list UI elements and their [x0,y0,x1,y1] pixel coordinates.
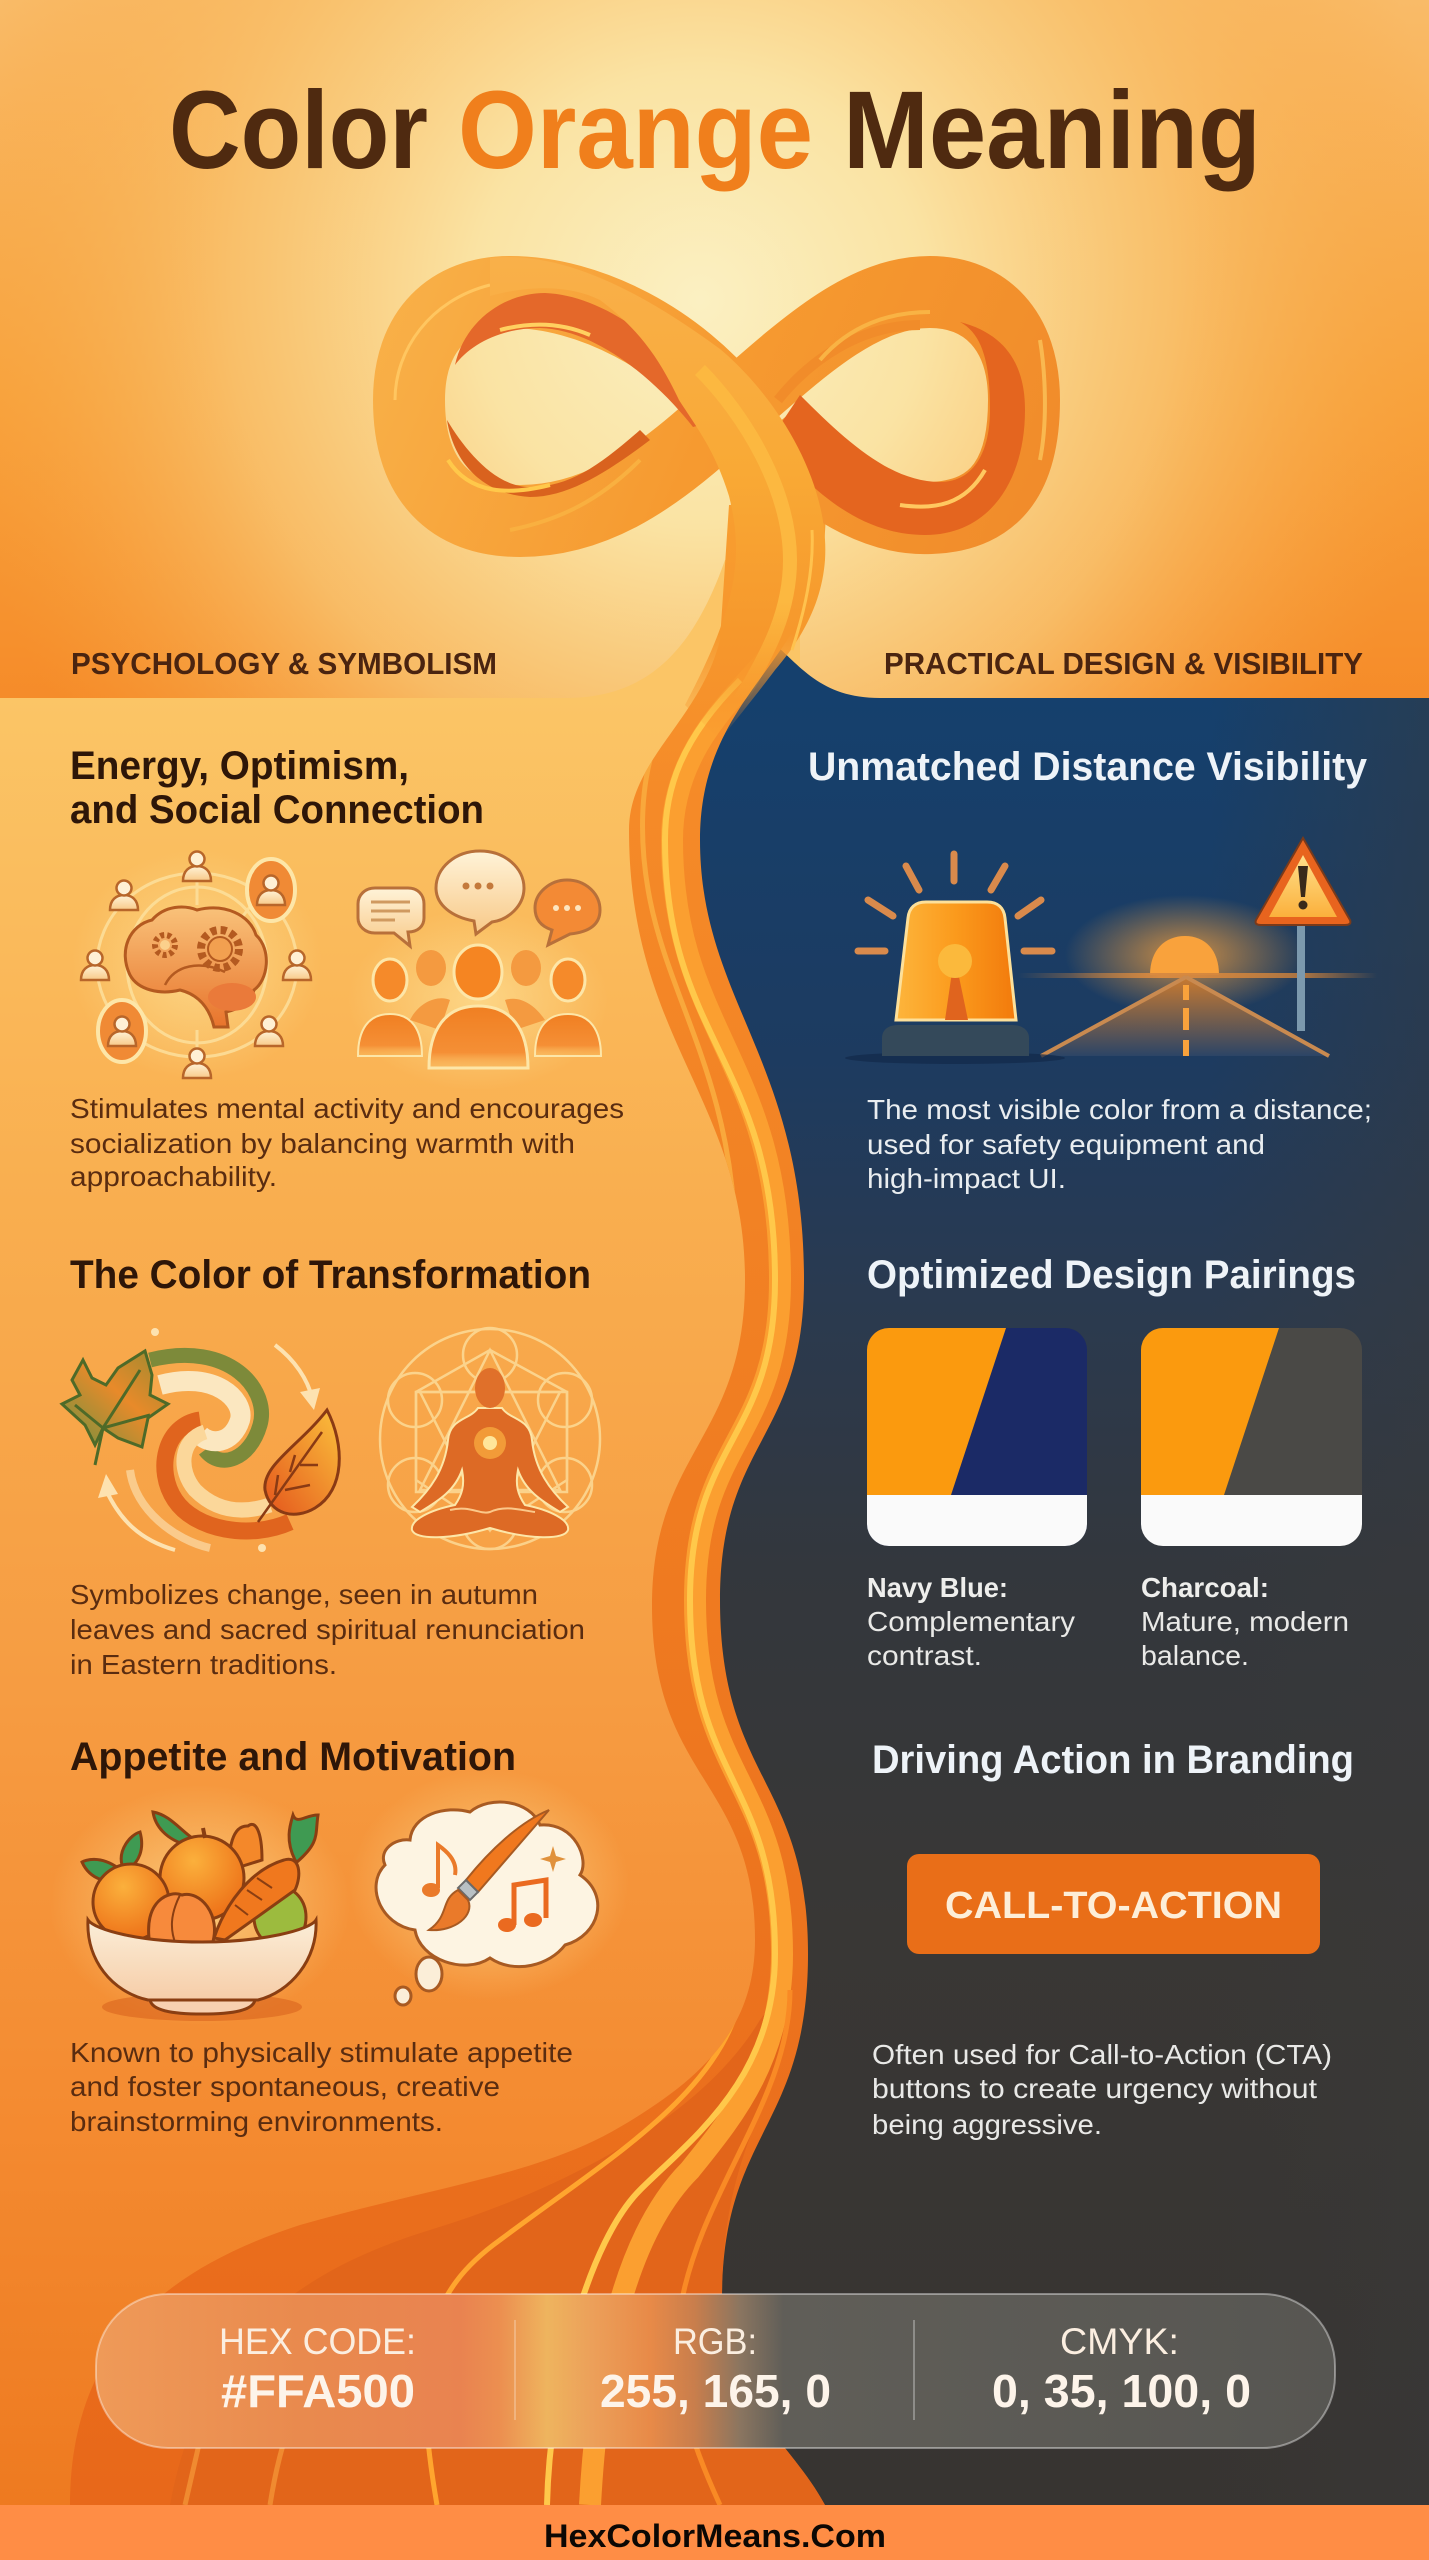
heading: energy: and Social Connection [70,788,484,832]
text: energy description: socialization by balancing warmth with [70,1128,575,1159]
stat: hex code: #FFA500 [221,2365,415,2417]
title: Orange [458,69,813,192]
text: visibility description [867,1094,1372,1194]
swatch: charcoal [1141,1328,1362,1546]
icon: meditating figure [380,1328,600,1549]
text: transformation description [70,1579,585,1680]
stat: hex code [219,2321,416,2417]
text: appetite description: brainstorming environments. [70,2106,443,2137]
panel: psychology and symbolism [0,560,800,2505]
stats pill [96,2294,1335,2448]
icon: people with speech bubbles [348,851,608,1090]
label: navy blue [867,1572,1075,1671]
infinity ribbon [395,257,1045,740]
text: appetite description: Known to physically stimulate appetite [70,2037,573,2068]
stat: rgb [600,2321,831,2417]
heading: energy: Energy, Optimism, [70,744,409,788]
icon: leaf swirl [62,1328,339,1552]
footer bar [0,2505,1429,2560]
stat: rgb: RGB: [673,2321,757,2362]
label: navy blue: Navy Blue: [867,1572,1008,1603]
text: transformation description: Symbolizes change, seen in autumn [70,1579,538,1610]
heading: energy [70,744,484,832]
swatch: navy blue [867,1328,1087,1546]
footer bar: HexColorMeans.Com [544,2518,886,2554]
text: transformation description: in Eastern traditions. [70,1649,337,1680]
section header: psychology: PSYCHOLOGY & SYMBOLISM [71,646,497,681]
title: Meaning [843,69,1261,192]
heading: transformation: The Color of Transformation [70,1253,591,1297]
text: branding description: buttons to create urgency without [872,2073,1317,2104]
text: branding description: being aggressive. [872,2109,1102,2140]
heading: appetite: Appetite and Motivation [70,1735,516,1779]
icon: creative thought cloud [349,1770,629,2005]
text: appetite description: and foster spontaneous, creative [70,2071,500,2102]
icon: fruit bowl [50,1785,350,2025]
icon: road at sunset with warning sign [1018,838,1377,1056]
stat: cmyk: 0, 35, 100, 0 [992,2365,1251,2417]
text: visibility description: high-impact UI. [867,1163,1066,1194]
text: visibility description: used for safety equipment and [867,1129,1265,1160]
text: branding description: Often used for Call-to-Action (CTA) [872,2039,1332,2070]
icon: beacon [845,854,1065,1064]
text: appetite description [70,2037,573,2137]
icon: brain network [72,850,322,1080]
text: branding description [872,2039,1332,2140]
label: charcoal: Mature, modern [1141,1606,1349,1637]
stat: cmyk [992,2321,1251,2417]
panel: practical design and visibility [685,640,1429,2505]
label: charcoal: Charcoal: [1141,1572,1269,1603]
central flowing stream [70,500,826,2505]
background: top gradient [0,0,1429,720]
label: charcoal: balance. [1141,1640,1249,1671]
text: energy description [70,1093,624,1192]
heading: visibility: Unmatched Distance Visibility [808,745,1368,789]
text: energy description: Stimulates mental activity and encourages [70,1093,624,1124]
section header: practical: PRACTICAL DESIGN & VISIBILITY [884,646,1363,681]
label: navy blue: contrast. [867,1640,982,1671]
stat: hex code: HEX CODE: [219,2321,416,2362]
call-to-action button [907,1854,1320,1954]
heading: pairings: Optimized Design Pairings [867,1253,1356,1297]
stat: cmyk: CMYK: [1060,2321,1179,2362]
stat: rgb: 255, 165, 0 [600,2365,831,2417]
text: transformation description: leaves and sacred spiritual renunciation [70,1614,585,1645]
title: Color [169,69,428,192]
text: visibility description: The most visible color from a distance; [867,1094,1372,1125]
text: energy description: approachability. [70,1161,277,1192]
label: navy blue: Complementary [867,1606,1075,1637]
label: charcoal [1141,1572,1349,1671]
heading: branding: Driving Action in Branding [872,1738,1354,1782]
title [169,69,1261,192]
call-to-action button: CALL-TO-ACTION [945,1885,1282,1927]
